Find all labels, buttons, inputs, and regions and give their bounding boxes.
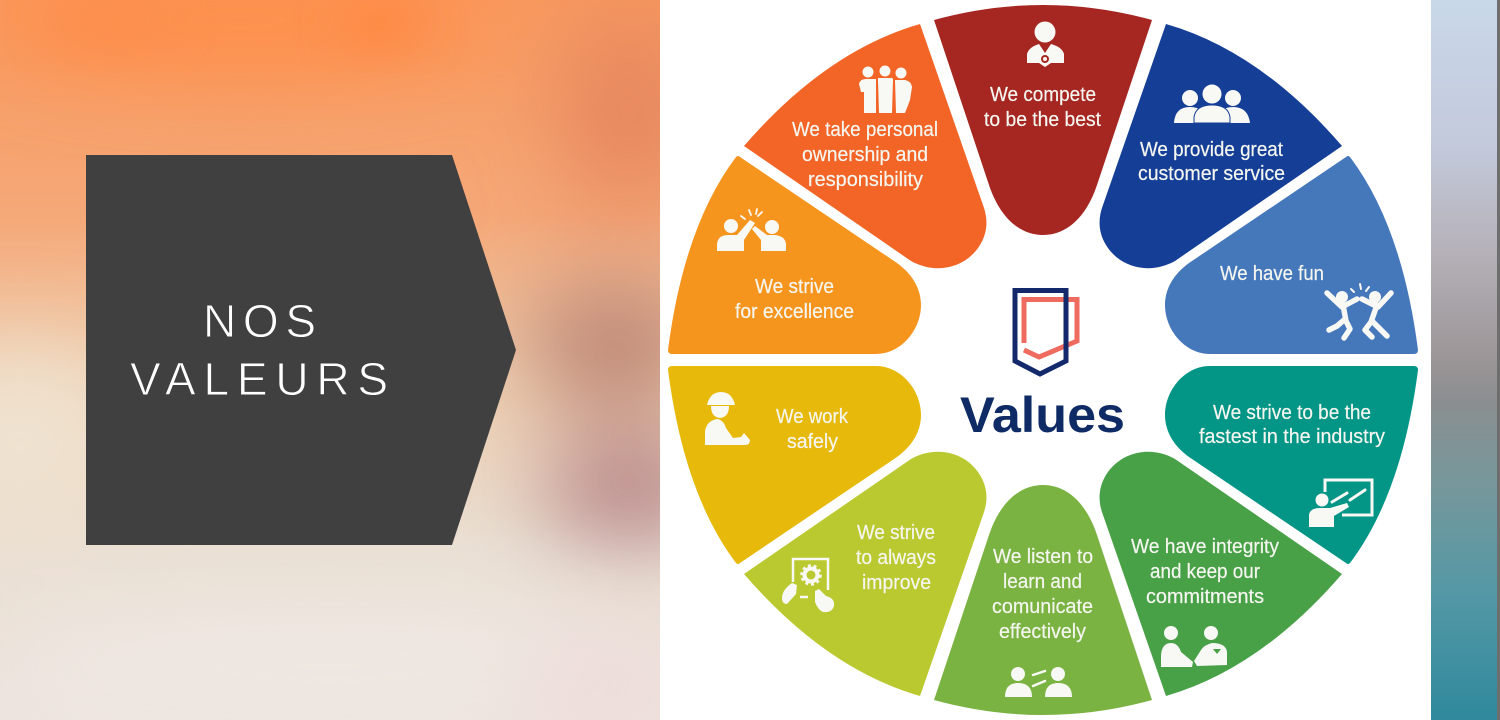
- label: We provide great: [1140, 139, 1283, 161]
- arrow panel: nos valeurs: [86, 155, 516, 545]
- label: [735, 276, 854, 323]
- segment: always improve: [744, 452, 986, 696]
- heading: NOS: [203, 295, 316, 347]
- label: [792, 119, 938, 191]
- icon: three people: [1174, 84, 1250, 123]
- label: responsibility: [808, 169, 923, 191]
- segment: we have fun: [1165, 156, 1418, 354]
- icon: worker with hard hat: [705, 392, 750, 445]
- label: We have integrity: [1131, 536, 1279, 558]
- right gradient strip: [1431, 0, 1500, 720]
- label: We compete: [990, 84, 1096, 106]
- label: [1199, 402, 1385, 448]
- segment: fastest in the industry: [1165, 366, 1418, 564]
- label: customer service: [1138, 163, 1285, 185]
- label: improve: [862, 572, 931, 594]
- segment: great customer service: [1100, 24, 1342, 268]
- icon: high five: [717, 209, 786, 251]
- heading: VALEURS: [130, 353, 388, 405]
- label: and keep our: [1150, 561, 1260, 583]
- label: ownership and: [802, 144, 928, 166]
- segment: listen and communicate: [934, 485, 1152, 715]
- label: learn and: [1003, 571, 1082, 593]
- segment: integrity and commitments: [1100, 452, 1342, 696]
- label: [1131, 536, 1279, 608]
- label: safely: [787, 431, 838, 453]
- label: We work: [776, 406, 849, 428]
- label: [1138, 139, 1285, 185]
- label: [992, 546, 1093, 643]
- label: We strive: [755, 276, 834, 298]
- segment: personal ownership: [744, 24, 986, 268]
- label: [856, 522, 936, 594]
- label: comunicate: [992, 596, 1093, 618]
- icon: dancing friends: [1327, 284, 1391, 338]
- label: [984, 84, 1101, 131]
- values wheel: [668, 5, 1418, 715]
- label: fastest in the industry: [1199, 426, 1385, 448]
- icon: two people caring: [1161, 626, 1227, 667]
- white panel behind wheel: [660, 0, 1431, 720]
- label: [776, 406, 849, 453]
- segment: we compete: [934, 5, 1152, 235]
- label: commitments: [1146, 586, 1264, 608]
- label: to always: [856, 547, 936, 569]
- heading: [130, 295, 388, 405]
- label: We strive to be the: [1213, 402, 1371, 424]
- segment: strive for excellence: [668, 156, 921, 354]
- icon: presenter at board: [1309, 480, 1372, 527]
- icon: people exchanging: [1005, 667, 1072, 697]
- label: to be the best: [984, 109, 1101, 131]
- segment: work safely: [668, 366, 921, 564]
- icon: medal person: [1027, 22, 1064, 67]
- center logo: shield: [1015, 290, 1077, 374]
- label: effectively: [999, 621, 1086, 643]
- label: for excellence: [735, 301, 854, 323]
- label: We strive: [857, 522, 935, 544]
- icon: standing team: [859, 66, 912, 113]
- icon: tablet with gear: [782, 559, 834, 612]
- label: We listen to: [993, 546, 1093, 568]
- label: We have fun: [1220, 263, 1324, 285]
- blurred orange background: [0, 0, 720, 720]
- label: We take personal: [792, 119, 938, 141]
- center title: values: Values: [960, 387, 1125, 443]
